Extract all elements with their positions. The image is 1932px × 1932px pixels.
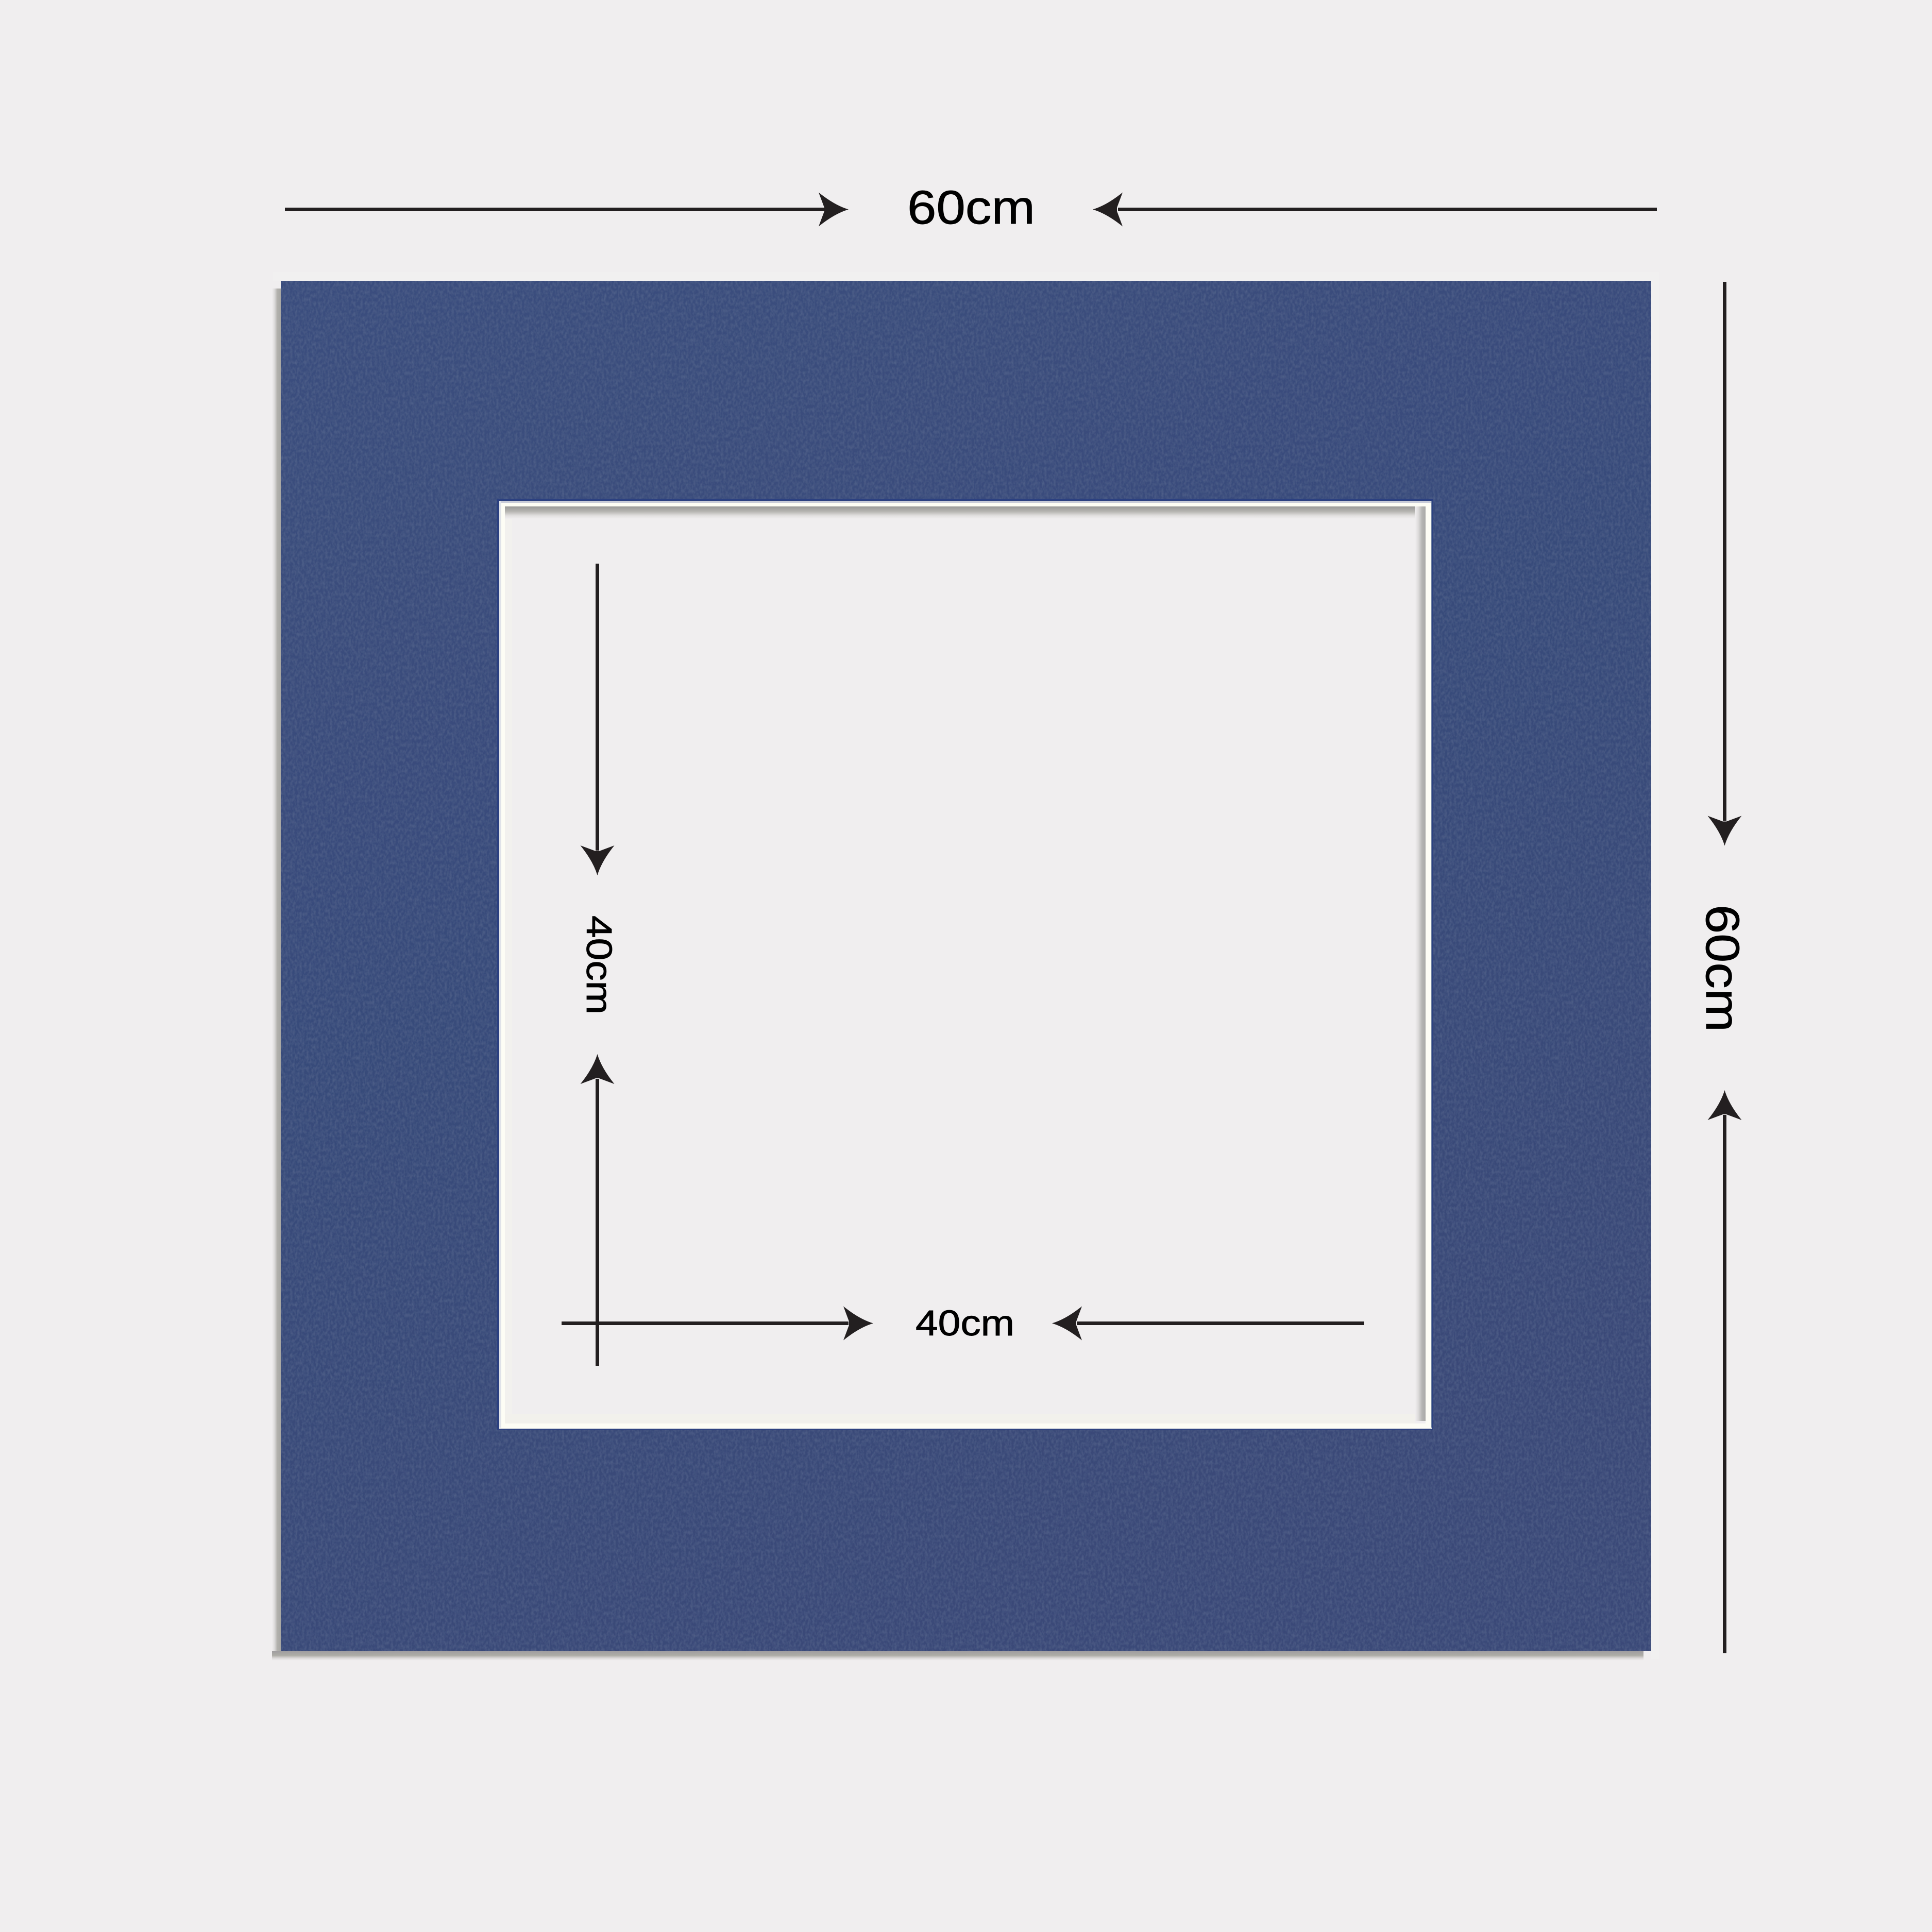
right 60cm dimension xyxy=(1696,282,1749,1653)
mat drop shadow xyxy=(272,272,1659,1660)
label: 60cm right: 60cm xyxy=(1696,905,1749,1032)
arrow: right side pointing down xyxy=(1707,282,1741,846)
label: 40cm horizontal: 40cm xyxy=(916,1303,1014,1343)
inner horizontal 40cm dimension xyxy=(562,1303,1364,1343)
top 60cm dimension xyxy=(285,181,1657,234)
arrow: top left pointing right xyxy=(285,193,849,227)
arrow: inner pointing down xyxy=(580,564,614,875)
arrow: inner pointing left xyxy=(1052,1307,1364,1341)
arrow: inner pointing right xyxy=(562,1307,873,1341)
arrow: top right pointing left xyxy=(1093,193,1657,227)
arrow: right side pointing up xyxy=(1707,1090,1741,1653)
mat board with window cut-out xyxy=(272,272,1659,1660)
mat board panel xyxy=(281,281,1651,1651)
arrow: inner pointing up xyxy=(580,1054,614,1366)
window opening xyxy=(497,499,1433,1430)
label: 60cm top: 60cm xyxy=(907,181,1035,234)
window inner shadows xyxy=(505,506,1426,1423)
inner vertical 40cm dimension xyxy=(579,564,619,1366)
label: 40cm vertical: 40cm xyxy=(579,916,619,1014)
